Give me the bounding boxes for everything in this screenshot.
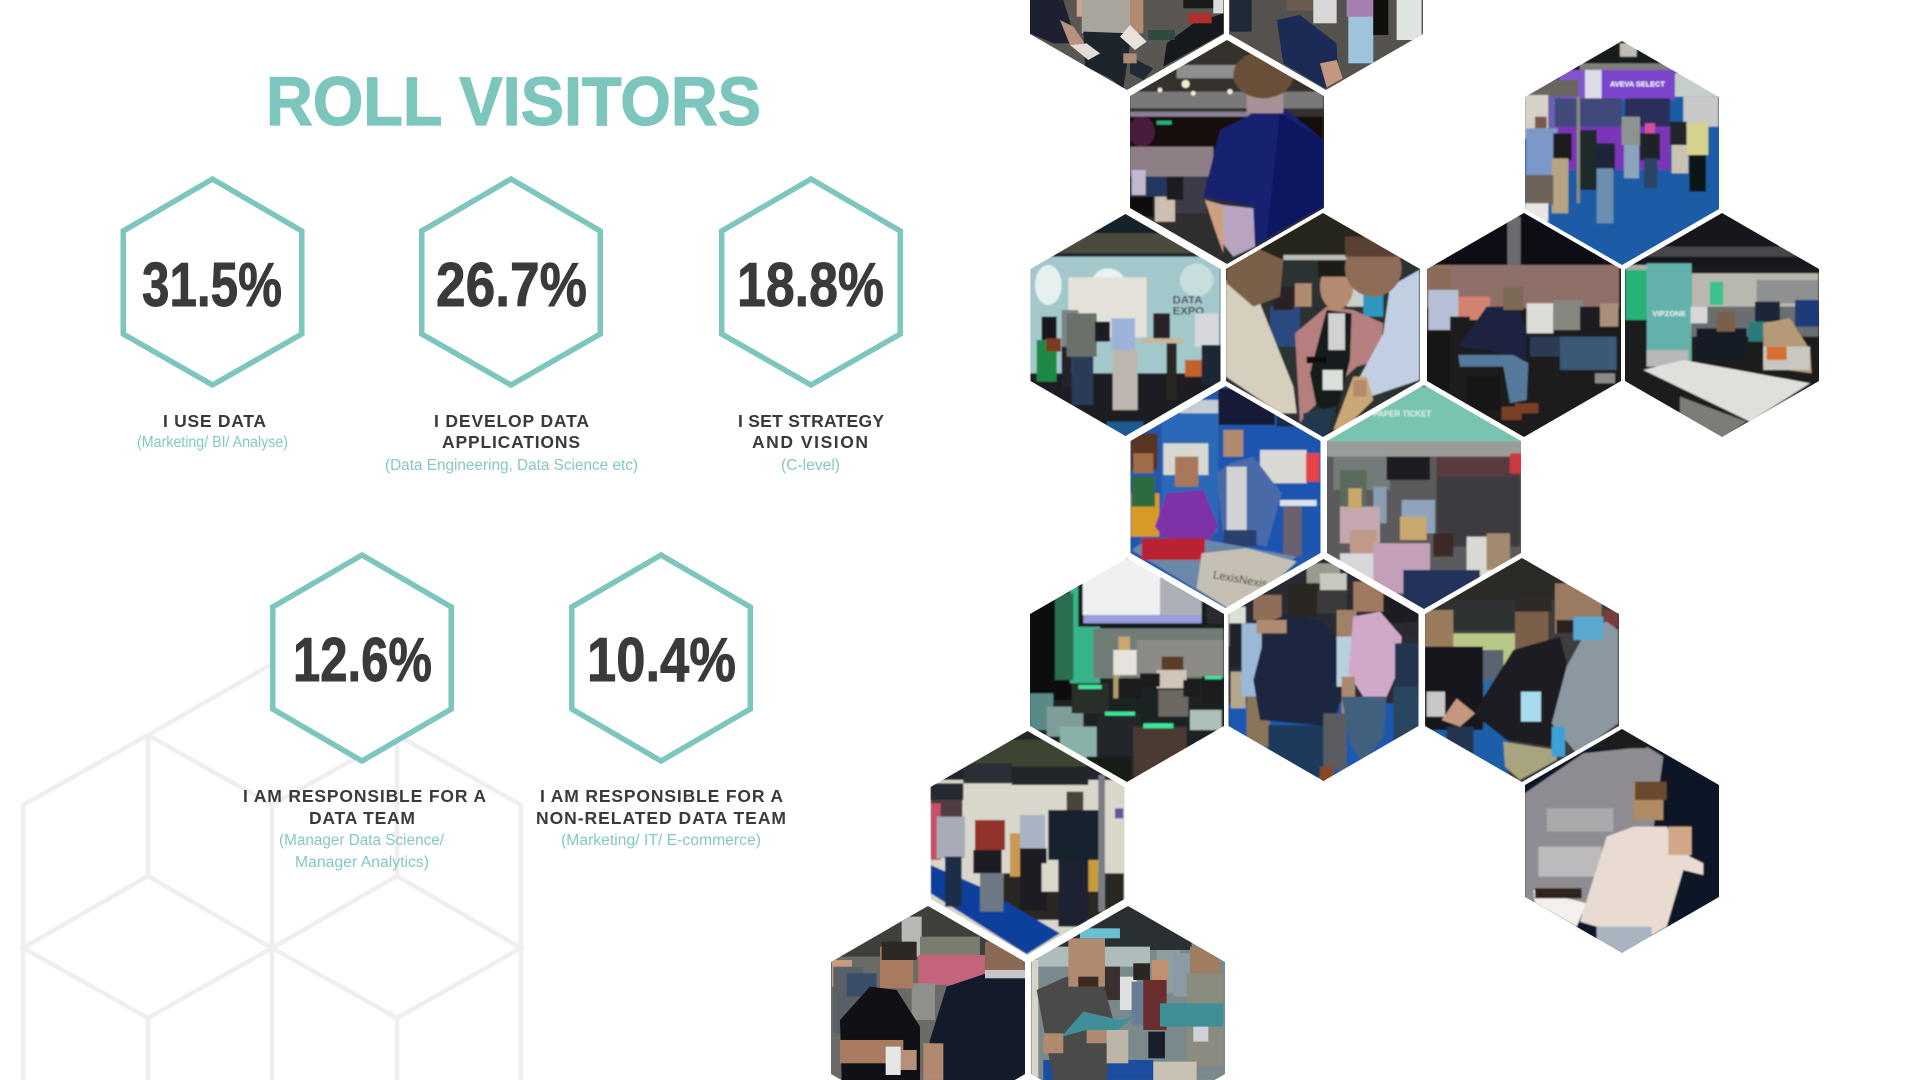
stat: 12.6% I am responsible for a data team	[243, 555, 486, 871]
photo hexagon: VIP zone table	[1623, 210, 1823, 443]
photo hexagon: paper ticket entrance crowd	[1327, 385, 1521, 609]
photo hexagon: Data Expo teal stand	[1027, 210, 1227, 440]
photo hexagon: visitors walking in line	[1227, 0, 1427, 93]
photo hexagon: VIP zone table: VIPZONE	[1652, 309, 1686, 318]
stat: 18.8% I set strategy and vision: 18.8%	[737, 251, 884, 320]
stat: 12.6% I am responsible for a data team: I AM RESPONSIBLE FOR A	[243, 786, 486, 806]
stat: 26.7% I develop data applications: APPLICATIONS	[442, 432, 580, 452]
stat: 10.4% I am responsible for a non-related data team: I AM RESPONSIBLE FOR A	[540, 786, 783, 806]
background hexagon line pattern	[23, 664, 521, 1080]
photo hexagon: Data Expo teal stand: DATA	[1173, 294, 1202, 306]
stat: 26.7% I develop data applications	[385, 179, 638, 474]
photo hexagon: AVEVA booth with blue carpet: AVEVA SELECT	[1610, 80, 1665, 89]
photo hexagon: visitors reading booklets	[1028, 903, 1228, 1080]
photo hexagon: visitors exchanging flyers	[1027, 0, 1227, 93]
stat: 26.7% I develop data applications: 26.7%	[436, 251, 587, 320]
photo hexagon: keynote speaker on stage	[1522, 727, 1722, 957]
photo hexagon: man in black polo talking	[829, 903, 1029, 1080]
photo hexagon: Big Data stage with green headsets	[1027, 553, 1227, 783]
stat: 18.8% I set strategy and vision: I SET STRATEGY	[738, 411, 884, 431]
photo hexagon: LexisNexis stand	[1127, 385, 1323, 612]
photo hexagon: speaker watching audience	[1127, 37, 1327, 270]
stat: 12.6% I am responsible for a data team: Manager Analytics)	[295, 854, 429, 871]
stat: 10.4% I am responsible for a non-related data team: 10.4%	[587, 626, 736, 695]
stat: 31.5% I use data: 31.5%	[142, 251, 282, 320]
stat: 31.5% I use data: (Marketing/ BI/ Analyse)	[137, 434, 288, 451]
stat: 18.8% I set strategy and vision	[722, 179, 900, 474]
photo hexagon: booth visitors on blue floor	[927, 730, 1127, 957]
stat: 18.8% I set strategy and vision: (C-level)	[781, 457, 840, 474]
photo hexagon: three men looking at a phone	[1223, 210, 1423, 443]
stat: 10.4% I am responsible for a non-related data team	[536, 555, 786, 849]
photo hexagon: seated conference audience	[1423, 210, 1623, 443]
photo hexagon: men in black hoodies and grey suit	[1422, 555, 1622, 785]
photo hexagon: LexisNexis stand: LexisNexis	[1212, 569, 1268, 591]
stat: 12.6% I am responsible for a data team: DATA TEAM	[309, 808, 415, 828]
stat: 18.8% I set strategy and vision: AND VISION	[752, 432, 868, 452]
stat: 26.7% I develop data applications: I DEVELOP DATA	[434, 411, 589, 431]
photo hexagon: networking men in suit and pink shirt	[1227, 557, 1423, 787]
stat: 12.6% I am responsible for a data team: (Manager Data Science/	[279, 832, 445, 849]
stat: 26.7% I develop data applications: (Data Engineering, Data Science etc)	[385, 457, 638, 474]
stat: 10.4% I am responsible for a non-related data team: (Marketing/ IT/ E-commerce)	[561, 832, 761, 849]
photo hexagon: AVEVA booth with blue carpet	[1520, 40, 1723, 273]
stat: 31.5% I use data	[123, 179, 302, 451]
stat: 31.5% I use data: I USE DATA	[163, 411, 266, 431]
stat: 10.4% I am responsible for a non-related data team: NON-RELATED DATA TEAM	[536, 808, 786, 828]
photo hexagon: Data Expo teal stand: EXPO	[1173, 306, 1204, 318]
stat: 12.6% I am responsible for a data team: 12.6%	[293, 626, 432, 695]
title: ROLL VISITORS	[266, 63, 761, 140]
photo hexagon: paper ticket entrance crowd: PAPER TICKET	[1373, 410, 1431, 419]
